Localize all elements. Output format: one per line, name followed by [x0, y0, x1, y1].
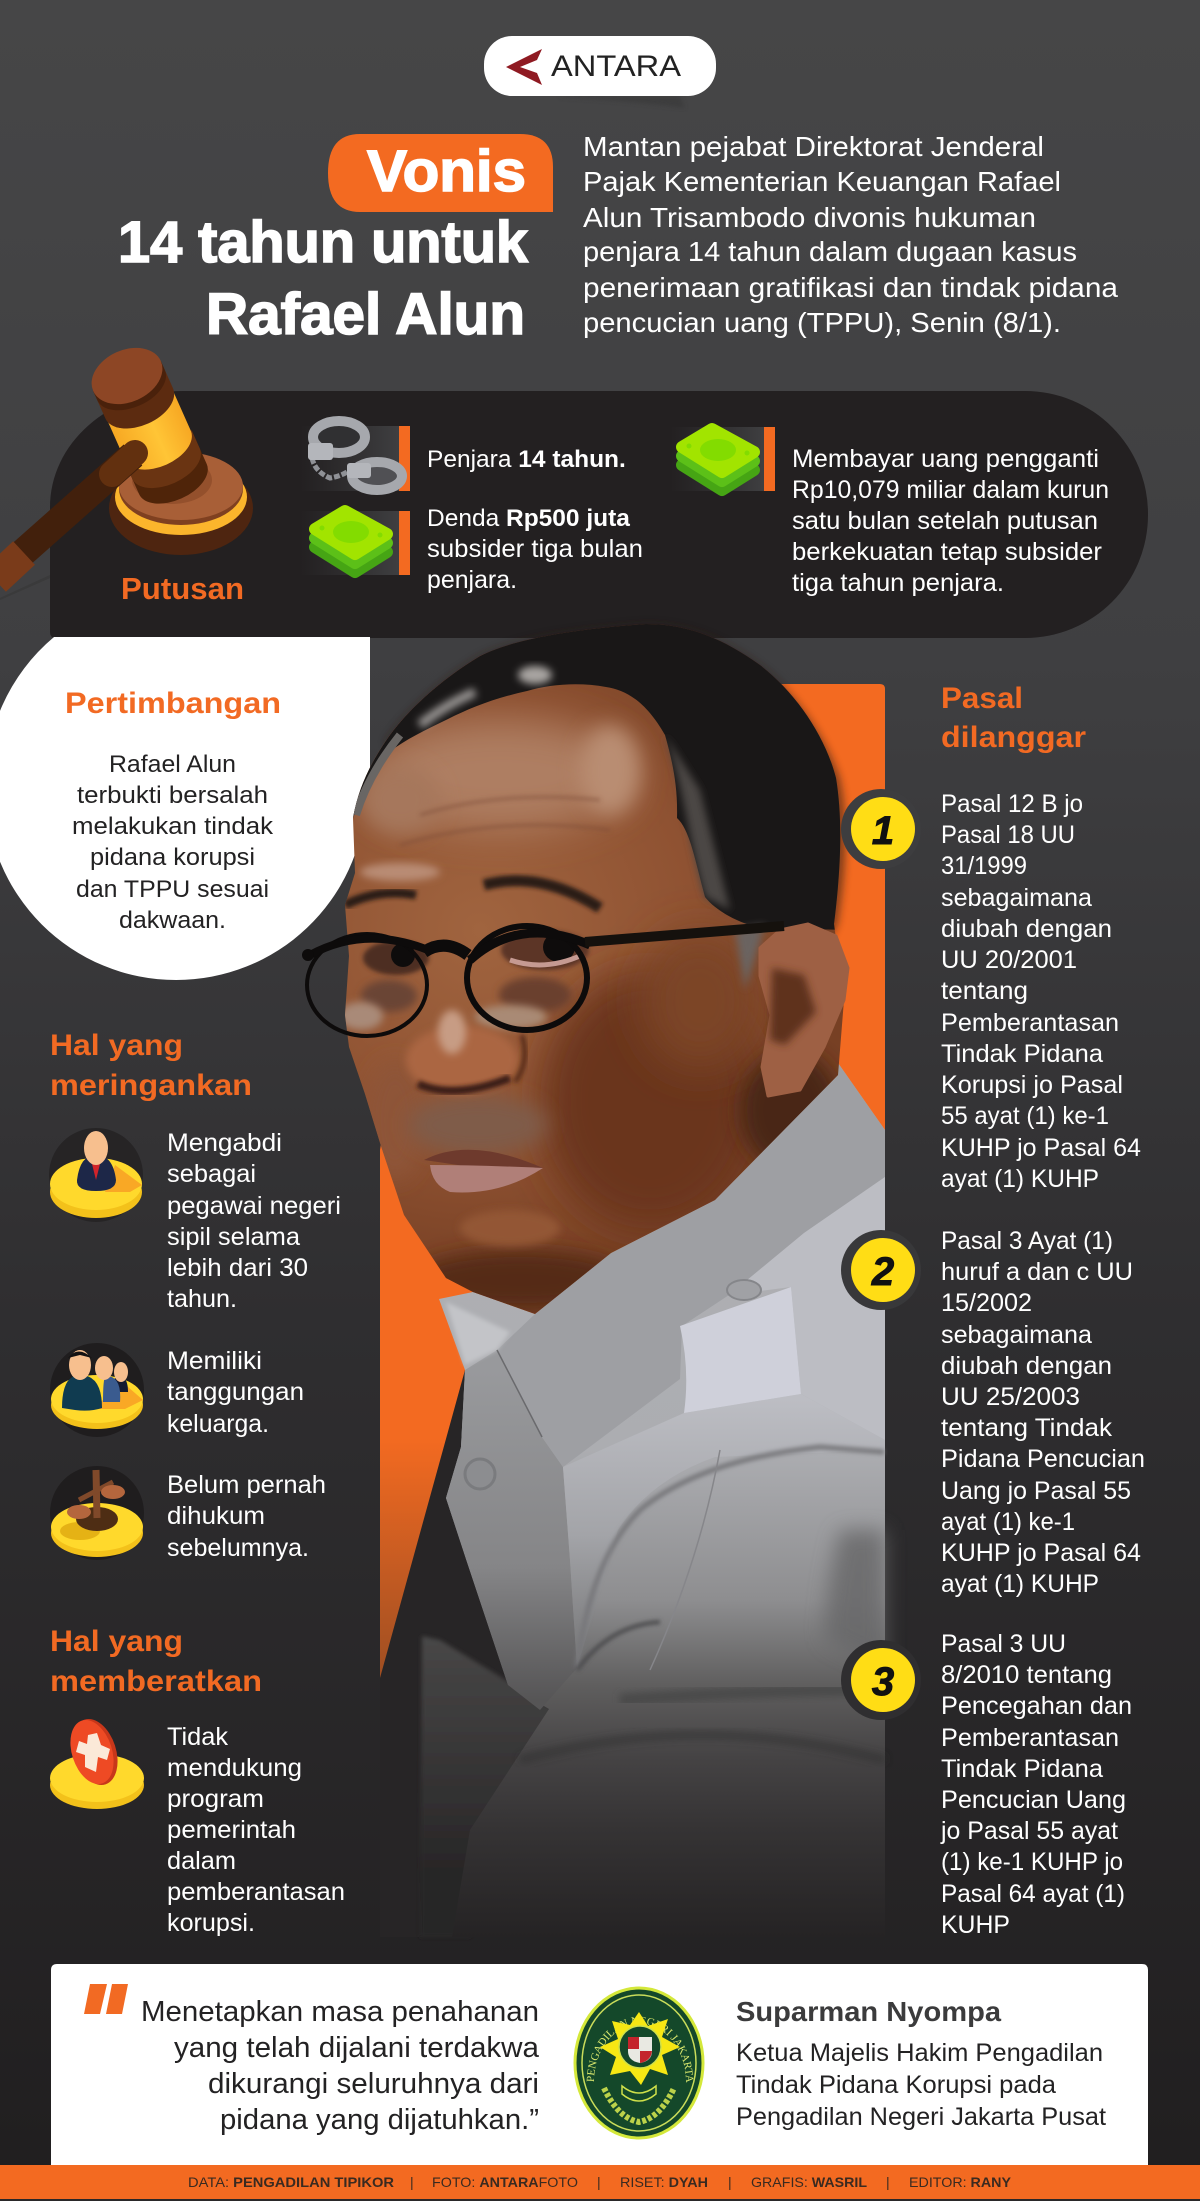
- text: denda: subsider tiga bulan: [427, 535, 643, 563]
- pasal 1 text: ayat (1) KUHP: [941, 1165, 1099, 1193]
- footer: [0, 2165, 1200, 2201]
- text: item 2: Memiliki: [167, 1347, 262, 1375]
- quote text: yang telah dijalani terdakwa: [174, 2032, 540, 2064]
- icon: quote mark: [84, 1984, 128, 2014]
- pasal 1 text: tentang: [941, 977, 1028, 1005]
- glasses: [305, 926, 784, 1036]
- pasal 2 text: tentang Tindak: [941, 1414, 1113, 1442]
- judge name: Suparman Nyompa: [736, 1996, 1001, 2027]
- panel: putusan: [0, 337, 1148, 638]
- logo pill: [484, 36, 716, 108]
- text: item 1: lebih dari 30: [167, 1254, 308, 1282]
- pasal 3 text: Pasal 64 ayat (1): [941, 1880, 1125, 1908]
- pasal 1 text: Korupsi jo Pasal: [941, 1071, 1123, 1099]
- pasal 1 text: sebagaimana: [941, 884, 1092, 912]
- pasal 2 text: Uang jo Pasal 55: [941, 1477, 1131, 1505]
- pasal 2 text: [941, 1227, 1145, 1598]
- footer: FOTO: ANTARAFOTO: [432, 2174, 578, 2190]
- face: [330, 610, 860, 1330]
- brow highlight: [360, 863, 440, 881]
- heading: hal yang memberatkan: memberatkan: [50, 1665, 262, 1698]
- panel: pertimbangan: [0, 637, 370, 980]
- text: item 4: dalam: [167, 1847, 236, 1875]
- intro paragraph: Pajak Kementerian Keuangan Rafael: [583, 166, 1061, 197]
- icon: civil servant: [49, 1128, 143, 1222]
- pasal 1 text: 31/1999: [941, 852, 1027, 880]
- orange backdrop: [380, 684, 885, 1690]
- pasal 2 text: Pasal 3 Ayat (1): [941, 1227, 1113, 1255]
- pasal 2 text: diubah dengan: [941, 1352, 1112, 1380]
- pasal 1 text: Pasal 18 UU: [941, 821, 1075, 849]
- pasal 2 text: 15/2002: [941, 1289, 1032, 1317]
- intro paragraph: Alun Trisambodo divonis hukuman: [583, 202, 1036, 233]
- footer: RISET: DYAH: [620, 2174, 708, 2190]
- head shadow: [385, 624, 846, 1000]
- pasal 3 text: Pemberantasan: [941, 1724, 1119, 1752]
- text: item 1: tahun.: [167, 1285, 237, 1313]
- pasal 1 text: UU 20/2001: [941, 946, 1077, 974]
- photo shadow below diagonal: [380, 1370, 885, 1937]
- text: item 4: pemberantasan: [167, 1878, 345, 1906]
- intro paragraph: [583, 131, 1118, 338]
- text: item 3: sebelumnya.: [167, 1534, 309, 1562]
- badge: 2: 2: [871, 1250, 894, 1294]
- pasal 1 text: 55 ayat (1) ke-1: [941, 1102, 1109, 1130]
- badge: 1: 1: [872, 809, 894, 853]
- judge title: Tindak Pidana Korupsi pada: [736, 2071, 1056, 2099]
- icon: handcuffs: [300, 421, 410, 491]
- pasal 2 text: KUHP jo Pasal 64: [941, 1539, 1141, 1567]
- text: uang pengganti: tiga tahun penjara.: [792, 569, 1004, 597]
- text: uang pengganti: berkekuatan tetap subsider: [792, 538, 1102, 566]
- pasal 2 text: UU 25/2003: [941, 1383, 1080, 1411]
- judge title: Pengadilan Negeri Jakarta Pusat: [736, 2103, 1106, 2131]
- logo pill: ANTARA: [551, 50, 681, 83]
- pasal 3 text: 8/2010 tentang: [941, 1661, 1112, 1689]
- text: item 3: Belum pernah: [167, 1471, 326, 1499]
- pasal 3 text: Pencegahan dan: [941, 1692, 1132, 1720]
- heading: hal yang meringankan: [50, 1029, 252, 1102]
- hair: [340, 610, 850, 930]
- quote text: dikurangi seluruhnya dari: [208, 2068, 539, 2100]
- text: item 2: keluarga.: [167, 1410, 269, 1438]
- panel: pertimbangan: Pertimbangan: [65, 687, 281, 720]
- badge: 1: [841, 789, 921, 869]
- text: item 2: [167, 1347, 304, 1438]
- text: uang pengganti: satu bulan setelah putusan: [792, 507, 1098, 535]
- pasal 2 text: ayat (1) ke-1: [941, 1508, 1075, 1536]
- quote text: pidana yang dijatuhkan.”: [220, 2104, 539, 2136]
- footer: |: [597, 2174, 601, 2190]
- text: penjara: Penjara 14 tahun.: [427, 446, 626, 473]
- title: [118, 134, 553, 347]
- pasal 1 text: Tindak Pidana: [941, 1040, 1103, 1068]
- badge: 3: 3: [872, 1660, 894, 1704]
- text: item 4: Tidak: [167, 1723, 228, 1751]
- pasal 3 text: [940, 1630, 1132, 1939]
- pasal 2 text: ayat (1) KUHP: [941, 1570, 1099, 1598]
- text: denda: [427, 505, 643, 594]
- lips: [424, 1150, 542, 1168]
- text: item 4: pemerintah: [167, 1816, 296, 1844]
- pasal 1 text: Pasal 12 B jo: [941, 790, 1083, 818]
- text: item 4: program: [167, 1785, 264, 1813]
- panel: pertimbangan: terbukti bersalah: [77, 782, 268, 809]
- quote text: [141, 1996, 540, 2136]
- text: item 4: korupsi.: [167, 1909, 255, 1937]
- pasal 1 text: [941, 790, 1141, 1193]
- icon: court seal: PENGADILAN NEGERI JAKARTA PUSAT: [586, 2016, 694, 2083]
- footer: GRAFIS: WASRIL: [751, 2174, 867, 2190]
- panel: pertimbangan: pidana korupsi: [90, 844, 255, 871]
- eyebrows: [345, 893, 416, 905]
- intro paragraph: penerimaan gratifikasi dan tindak pidana: [583, 272, 1118, 303]
- footer: |: [728, 2174, 732, 2190]
- panel: pertimbangan: Rafael Alun: [109, 751, 236, 778]
- text: item 4: mendukung: [167, 1754, 302, 1782]
- icon: red cross: [50, 1713, 144, 1809]
- panel: pertimbangan: dan TPPU sesuai: [76, 876, 269, 903]
- text: denda: Denda Rp500 juta: [427, 505, 630, 532]
- icon: scales: [50, 1466, 144, 1560]
- pasal 2 text: Pidana Pencucian: [941, 1445, 1145, 1473]
- text: item 2: tanggungan: [167, 1378, 304, 1406]
- pasal 3 text: KUHP: [941, 1911, 1010, 1939]
- intro paragraph: pencucian uang (TPPU), Senin (8/1).: [583, 307, 1061, 338]
- icon: family: [50, 1343, 144, 1437]
- pasal 1 text: diubah dengan: [941, 915, 1112, 943]
- quote text: Menetapkan masa penahanan: [141, 1996, 539, 2028]
- icon: court seal: [574, 1986, 704, 2140]
- heading: putusan: Putusan: [121, 571, 244, 606]
- pasal 3 text: Pencucian Uang: [941, 1786, 1126, 1814]
- forehead wrinkles: [400, 797, 610, 845]
- panel: pertimbangan: dakwaan.: [119, 907, 226, 934]
- badge: 3: [841, 1640, 921, 1720]
- pasal 1 text: KUHP jo Pasal 64: [941, 1134, 1141, 1162]
- heading: hal yang memberatkan: Hal yang: [50, 1625, 183, 1658]
- heading: hal yang meringankan: Hal yang: [50, 1029, 183, 1062]
- icon: money stack 2: [670, 427, 775, 491]
- title: Rafael Alun: [206, 282, 525, 347]
- icon: money stack: [300, 511, 410, 575]
- heading: pasal dilanggar: [941, 682, 1086, 754]
- footer: EDITOR: RANY: [909, 2174, 1012, 2190]
- badge: 2: [841, 1230, 921, 1310]
- title: Vonis: [367, 139, 526, 204]
- footer: |: [886, 2174, 890, 2190]
- text: item 1: sipil selama: [167, 1223, 300, 1251]
- footer: DATA: PENGADILAN TIPIKOR: [188, 2174, 394, 2190]
- judge title: Ketua Majelis Hakim Pengadilan: [736, 2039, 1103, 2067]
- text: item 1: sebagai: [167, 1160, 256, 1188]
- pasal 1 text: Pemberantasan: [941, 1009, 1119, 1037]
- pasal 2 text: huruf a dan c UU: [941, 1258, 1133, 1286]
- title: 14 tahun untuk: [118, 210, 529, 275]
- pasal 3 text: Pasal 3 UU: [941, 1630, 1066, 1658]
- judge title: [736, 2039, 1106, 2131]
- text: uang pengganti: Membayar uang pengganti: [792, 445, 1099, 473]
- nose: [406, 1026, 518, 1094]
- text: uang pengganti: Rp10,079 miliar dalam kurun: [792, 476, 1109, 504]
- heading: pasal dilanggar: dilanggar: [941, 721, 1086, 754]
- text: item 3: dihukum: [167, 1502, 265, 1530]
- pasal 3 text: (1) ke-1 KUHP jo: [941, 1848, 1123, 1876]
- footer: |: [410, 2174, 414, 2190]
- pasal 3 text: jo Pasal 55 ayat: [940, 1817, 1118, 1845]
- heading: hal yang memberatkan: [50, 1625, 262, 1698]
- pasal 2 text: sebagaimana: [941, 1321, 1092, 1349]
- pasal 3 text: Tindak Pidana: [941, 1755, 1103, 1783]
- intro paragraph: Mantan pejabat Direktorat Jenderal: [583, 131, 1044, 162]
- text: item 1: pegawai negeri: [167, 1192, 341, 1220]
- text: item 1: Mengabdi: [167, 1129, 282, 1157]
- text: item 4: [167, 1723, 345, 1937]
- text: item 1: [167, 1129, 341, 1313]
- eye bags: [361, 980, 417, 1012]
- ear: [760, 924, 848, 1096]
- text: item 3: [167, 1471, 326, 1562]
- icon: gavel: [0, 337, 253, 600]
- heading: hal yang meringankan: meringankan: [50, 1069, 252, 1102]
- shirt: [420, 1043, 885, 1937]
- heading: pasal dilanggar: Pasal: [941, 682, 1023, 715]
- intro paragraph: penjara 14 tahun dalam dugaan kasus: [583, 236, 1077, 267]
- text: uang pengganti: [792, 445, 1109, 597]
- panel: pertimbangan: melakukan tindak: [72, 813, 274, 840]
- text: denda: penjara.: [427, 566, 517, 594]
- eyes: [363, 941, 429, 975]
- photo: man in white shirt: [305, 610, 885, 1937]
